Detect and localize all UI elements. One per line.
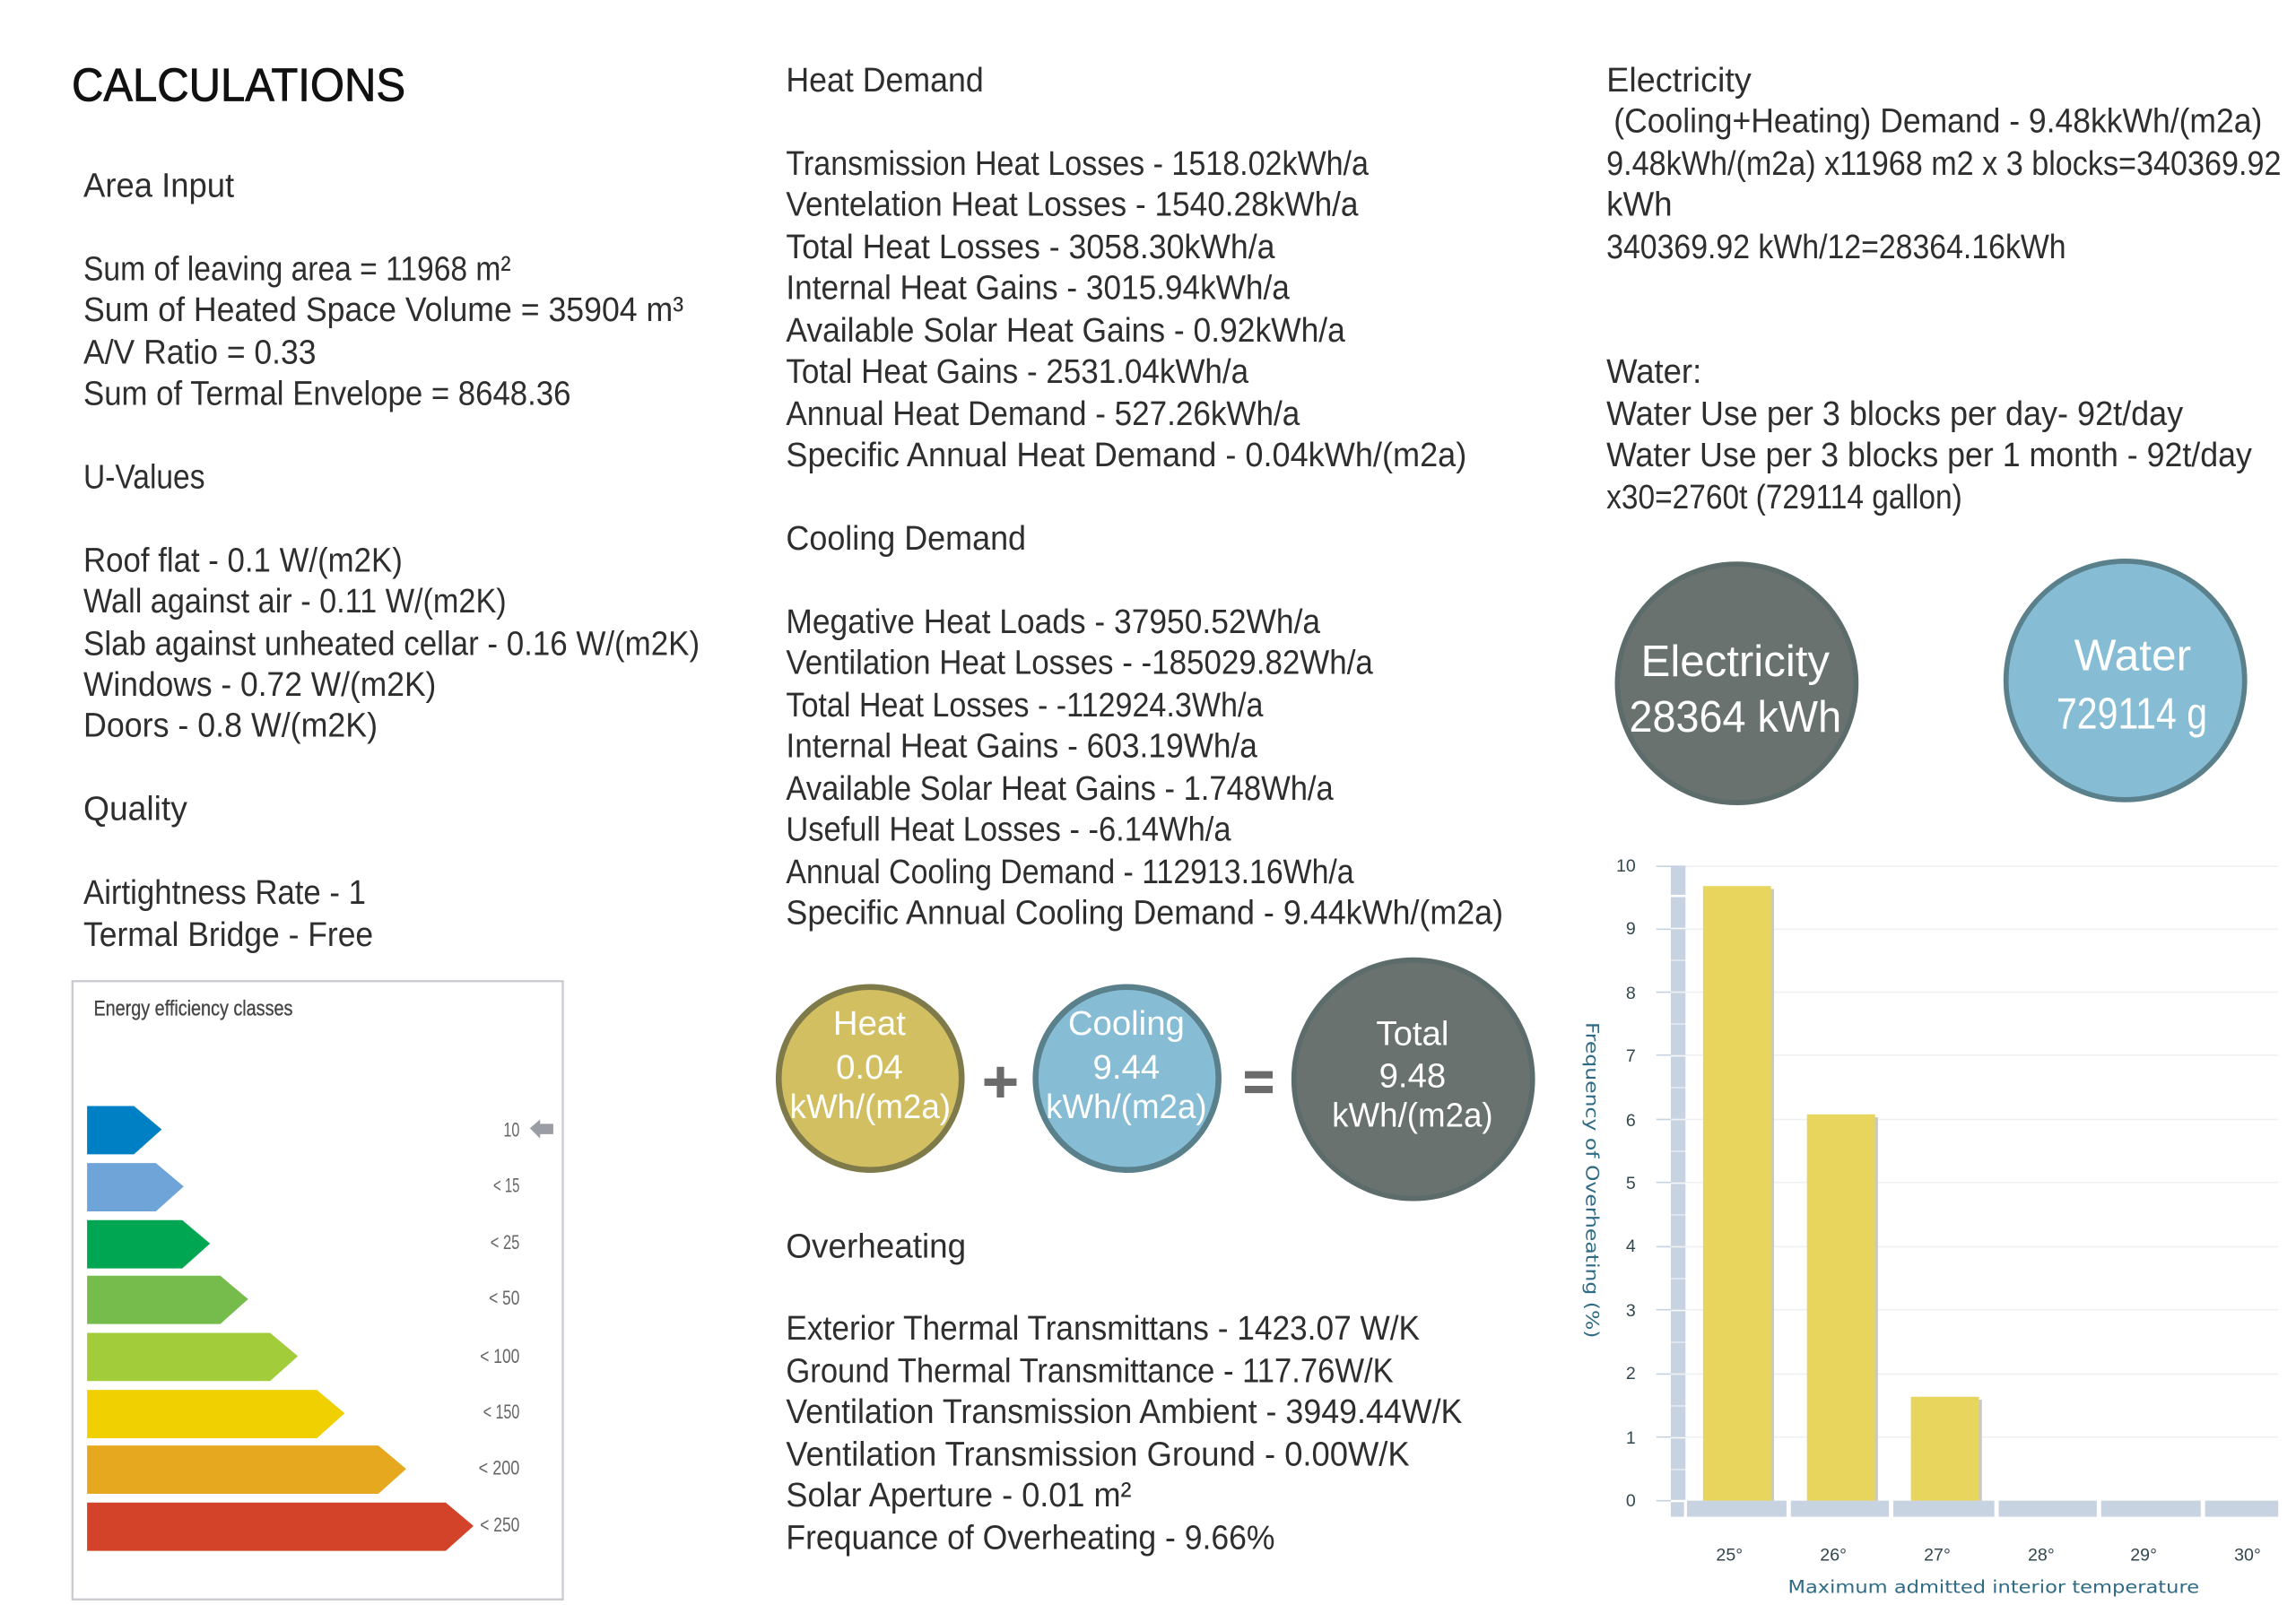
class labels: 10 — [503, 1118, 519, 1141]
text block: area input values: Sum of leaving area = 11968 m² — [83, 250, 511, 289]
text block: u-values list: Roof flat - 0.1 W/(m2K) — [83, 541, 403, 579]
text block: overheating list: Ventilation Transmission Ground - 0.00W/K — [786, 1435, 1410, 1473]
y axis labels: 8 — [1626, 984, 1636, 1003]
text block: heat demand list — [786, 144, 1466, 474]
text block: area input values — [83, 250, 683, 412]
x axis labels — [1716, 1546, 2261, 1566]
x axis labels: 30° — [2234, 1546, 2261, 1566]
text block: water calculation: Water Use per 3 blocks per 1 month - 92t/day — [1606, 436, 2253, 474]
circle: cooling: kWh/(m2a) — [1046, 1088, 1207, 1126]
y axis labels: 9 — [1626, 919, 1636, 939]
heading: u-values: U-Values — [83, 457, 204, 496]
heading: water: Water: — [1606, 352, 1701, 391]
text block: cooling demand list: Internal Heat Gains - 603.19Wh/a — [786, 727, 1258, 766]
circle: total: Total — [1376, 1014, 1448, 1053]
circle: heat: kWh/(m2a) — [789, 1088, 951, 1126]
text block: cooling demand list: Ventilation Heat Losses - -185029.82Wh/a — [786, 644, 1373, 682]
y axis labels: 7 — [1626, 1046, 1636, 1066]
circle: water total: Water — [2074, 631, 2191, 680]
circle: total — [1294, 960, 1533, 1199]
class labels: < 100 — [480, 1345, 519, 1367]
text block: electricity calculation — [1606, 102, 2282, 266]
class labels: < 250 — [480, 1514, 519, 1536]
text block: u-values list: Wall against air - 0.11 W/(m2K) — [83, 582, 507, 620]
class labels: < 150 — [483, 1401, 519, 1423]
y axis band — [1671, 865, 1685, 1517]
circle: water total: 729114 g — [2057, 690, 2207, 739]
heading: cooling demand: Cooling Demand — [786, 519, 1026, 558]
text block: cooling demand list: Total Heat Losses - -112924.3Wh/a — [786, 686, 1264, 724]
x axis band — [1687, 1501, 2278, 1517]
text block: u-values list: Slab against unheated cellar - 0.16 W/(m2K) — [83, 624, 700, 663]
class labels: < 50 — [489, 1287, 519, 1309]
chart title: Energy efficiency classes — [93, 998, 292, 1021]
panel: demand sum equation — [778, 960, 1533, 1199]
heading: area input: Area Input — [83, 167, 234, 205]
class labels: < 25 — [491, 1231, 519, 1254]
y axis labels: 2 — [1626, 1364, 1636, 1384]
text block: cooling demand list: Annual Cooling Demand - 112913.16Wh/a — [786, 853, 1354, 891]
text block: cooling demand list: Specific Annual Cooling Demand - 9.44kWh/(m2a) — [786, 894, 1503, 933]
class labels: < 15 — [493, 1174, 519, 1196]
text block: heat demand list: Internal Heat Gains - 3015.94kWh/a — [786, 269, 1290, 308]
text block: area input values: A/V Ratio = 0.33 — [83, 334, 317, 372]
heading: overheating: Overheating — [786, 1228, 966, 1266]
text block: overheating list: Solar Aperture - 0.01 m² — [786, 1476, 1132, 1514]
circle: total: 9.48 — [1379, 1057, 1446, 1096]
text block: heat demand list: Transmission Heat Losses - 1518.02kWh/a — [786, 144, 1370, 183]
text block: cooling demand list: Megative Heat Loads - 37950.52Wh/a — [786, 603, 1321, 641]
text block: u-values list — [83, 541, 700, 745]
text block: cooling demand list — [786, 603, 1503, 933]
circle: water total — [2006, 561, 2245, 800]
y axis labels: 1 — [1626, 1428, 1636, 1448]
text block: electricity calculation: (Cooling+Heating) Demand - 9.48kkWh/(m2a) — [1613, 102, 2262, 141]
x axis labels: 25° — [1716, 1546, 1743, 1566]
circle: heat — [778, 987, 961, 1170]
class labels: < 200 — [479, 1456, 519, 1479]
y axis labels: 6 — [1626, 1111, 1636, 1131]
text block: cooling demand list: Usefull Heat Losses - -6.14Wh/a — [786, 811, 1231, 849]
text block: water calculation: x30=2760t (729114 gallon) — [1606, 478, 1962, 516]
text block: area input values: Sum of Heated Space Volume = 35904 m³ — [83, 291, 683, 329]
x axis labels: 28° — [2028, 1546, 2055, 1566]
x axis title: Maximum admitted interior temperature — [1788, 1576, 2199, 1597]
circle: electricity total: Electricity — [1641, 638, 1831, 686]
text block: area input values: Sum of Termal Envelope = 8648.36 — [83, 374, 570, 412]
heading: heat demand: Heat Demand — [786, 61, 984, 100]
text block: heat demand list: Specific Annual Heat Demand - 0.04kWh/(m2a) — [786, 436, 1466, 474]
panel: middle column demand figures — [786, 61, 1503, 1557]
text block: overheating list — [786, 1309, 1463, 1557]
icon: equals — [1245, 1071, 1273, 1093]
text block: overheating list: Ventilation Transmission Ambient - 3949.44W/K — [786, 1392, 1463, 1431]
class arrows — [87, 1106, 474, 1551]
text block: cooling demand list: Available Solar Heat Gains - 1.748Wh/a — [786, 769, 1334, 808]
heading: quality: Quality — [83, 790, 188, 829]
x axis labels: 29° — [2130, 1546, 2157, 1566]
panel: left column inputs — [83, 167, 700, 954]
gridlines and ticks — [1657, 866, 2278, 1501]
text block: u-values list: Doors - 0.8 W/(m2K) — [83, 707, 378, 745]
x axis labels: 27° — [1924, 1546, 1951, 1566]
bars — [1703, 886, 1982, 1501]
y axis labels: 0 — [1626, 1491, 1636, 1511]
text block: electricity calculation: 340369.92 kWh/12=28364.16kWh — [1606, 228, 2066, 266]
text block: quality values: Airtightness Rate - 1 — [83, 873, 366, 912]
panel: right column electricity and water — [1606, 61, 2282, 516]
circle: cooling: Cooling — [1068, 1004, 1185, 1043]
circle: cooling — [1036, 987, 1219, 1170]
panel: energy efficiency classes chart — [73, 981, 563, 1600]
text block: overheating list: Exterior Thermal Transmittans - 1423.07 W/K — [786, 1309, 1420, 1348]
icon: current class arrow — [530, 1119, 553, 1139]
text block: heat demand list: Ventelation Heat Losses - 1540.28kWh/a — [786, 186, 1359, 224]
text block: heat demand list: Total Heat Losses - 3058.30kWh/a — [786, 228, 1275, 266]
text block: u-values list: Windows - 0.72 W/(m2K) — [83, 665, 436, 704]
text block: overheating list: Frequance of Overheating - 9.66% — [786, 1518, 1274, 1557]
icon: plus — [985, 1067, 1016, 1097]
circle: electricity total — [1617, 564, 1856, 802]
circle: electricity total: 28364 kWh — [1629, 693, 1841, 742]
y axis title: Frequency of Overheating (%) — [1581, 1022, 1602, 1338]
title: CALCULATIONS — [72, 60, 405, 112]
text block: quality values — [83, 873, 373, 954]
circle: heat: 0.04 — [836, 1048, 903, 1087]
text block: overheating list: Ground Thermal Transmittance - 117.76W/K — [786, 1351, 1394, 1390]
heading: electricity: Electricity — [1606, 61, 1752, 100]
text block: water calculation — [1606, 395, 2253, 516]
y axis labels — [1616, 856, 1636, 1511]
text block: heat demand list: Available Solar Heat Gains - 0.92kWh/a — [786, 311, 1345, 350]
text block: heat demand list: Annual Heat Demand - 527.26kWh/a — [786, 395, 1300, 433]
y axis labels: 4 — [1626, 1236, 1636, 1256]
text block: heat demand list: Total Heat Gains - 2531.04kWh/a — [786, 352, 1249, 391]
y axis labels: 5 — [1626, 1174, 1636, 1193]
text block: water calculation: Water Use per 3 blocks per day- 92t/day — [1606, 395, 2184, 433]
text block: quality values: Termal Bridge - Free — [83, 915, 373, 954]
circle: total: kWh/(m2a) — [1332, 1097, 1493, 1135]
y axis labels: 3 — [1626, 1301, 1636, 1321]
circle: heat: Heat — [833, 1004, 906, 1043]
text block: electricity calculation: kWh — [1606, 186, 1673, 224]
panel: overheating bar chart — [1581, 856, 2278, 1597]
class labels — [479, 1118, 519, 1536]
x axis labels: 26° — [1820, 1546, 1847, 1566]
circle: cooling: 9.44 — [1093, 1048, 1160, 1087]
y axis labels: 10 — [1616, 856, 1636, 876]
